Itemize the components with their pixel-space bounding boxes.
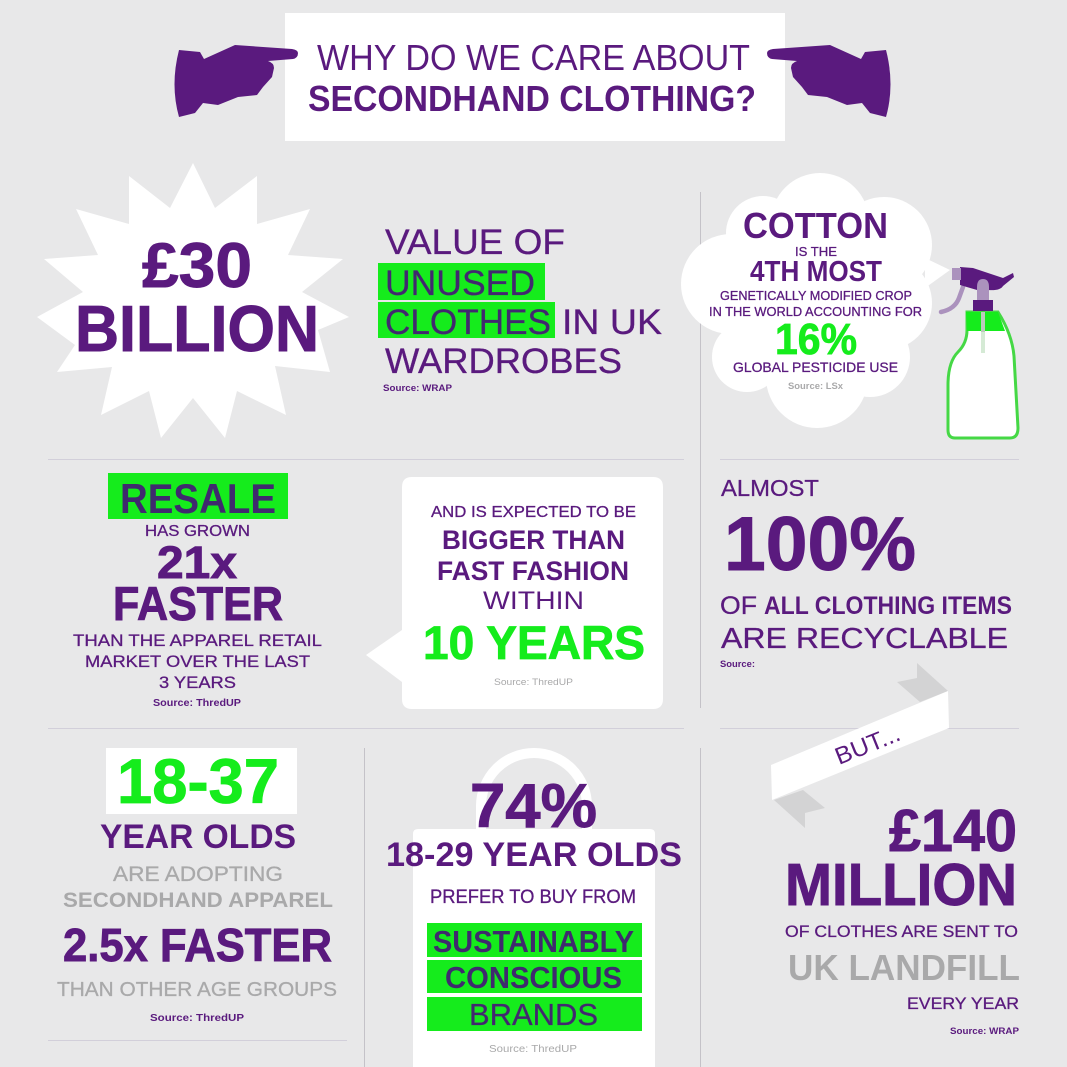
text block: bigger than fast fashion: Source: ThredUP: [494, 677, 573, 687]
text block: cotton: Source: LSx: [788, 381, 843, 391]
title: SECONDHAND CLOTHING?: [308, 78, 756, 119]
text block: 74 percent: 18-29 YEAR OLDS: [386, 836, 682, 874]
source: Source: WRAP: [383, 383, 452, 393]
panel: landfill: £140: [889, 798, 1017, 864]
bag body: [413, 829, 655, 1067]
panel: landfill: UK LANDFILL: [788, 947, 1020, 988]
highlight panel: [106, 748, 297, 814]
text block: resale growth: THAN THE APPAREL RETAIL: [73, 631, 322, 650]
text block: age group: THAN OTHER AGE GROUPS: [57, 979, 337, 1001]
panel: resale: [73, 473, 322, 709]
text block: bigger than fast fashion: FAST FASHION: [437, 556, 629, 586]
panel: speech bubble: [366, 477, 663, 709]
text block: cotton: 4TH MOST: [750, 256, 882, 288]
stat: 30 billion: BILLION: [75, 292, 319, 365]
text block: bigger than fast fashion: AND IS EXPECTED TO BE: [431, 504, 636, 521]
text block: age group: SECONDHAND APPAREL: [63, 889, 333, 912]
highlight: unused: [378, 263, 545, 300]
text block: age group: Source: ThredUP: [150, 1013, 244, 1024]
header: [174, 13, 890, 141]
banner: but: [771, 663, 949, 828]
title panel: [285, 13, 785, 141]
panel: recyclable: ALMOST: [721, 475, 819, 501]
panel: cotton: [681, 173, 1018, 438]
text block: 74 percent: [386, 772, 682, 1055]
panel: landfill: [785, 798, 1020, 1036]
text block: 74 percent: SUSTAINABLY: [433, 924, 634, 959]
panel: recyclable: [720, 475, 1012, 669]
text block: age group: [57, 747, 337, 1024]
panel: 30 billion: [37, 163, 349, 438]
text block: cotton: GLOBAL PESTICIDE USE: [733, 359, 898, 375]
text block: bigger than fast fashion: 10 YEARS: [423, 616, 645, 669]
panel: unused clothes: [378, 223, 662, 393]
panel: 18-37 year olds: [57, 747, 337, 1024]
text block: value of unused clothes: [385, 223, 662, 381]
text block: cotton: COTTON: [743, 205, 888, 246]
text block: cotton: 16%: [775, 315, 857, 364]
panel: landfill: MILLION: [785, 852, 1017, 918]
text block: value of unused clothes: WARDROBES: [385, 342, 622, 381]
text block: resale growth: Source: ThredUP: [153, 698, 241, 709]
panel: landfill: Source: WRAP: [950, 1026, 1019, 1036]
text block: 74 percent: Source: ThredUP: [489, 1044, 577, 1055]
text block: 74 percent: CONSCIOUS: [445, 960, 622, 995]
text block: cotton: IS THE: [795, 244, 837, 259]
panel: recyclable: Source:: [720, 659, 755, 669]
panel: landfill: EVERY YEAR: [907, 994, 1019, 1013]
bag handle: [481, 753, 587, 830]
panel: recyclable: ARE RECYCLABLE: [721, 623, 1008, 655]
text block: value of unused clothes: UNUSED: [385, 264, 535, 303]
text block: value of unused clothes: IN UK: [562, 303, 662, 342]
text block: 74 percent: 74%: [470, 772, 597, 841]
icon: left pointing hand: [174, 45, 298, 117]
highlight: clothes: [378, 302, 555, 338]
text block: age group: 2.5x FASTER: [63, 919, 332, 971]
text block: resale growth: MARKET OVER THE LAST: [85, 652, 310, 671]
text block: cotton: GENETICALLY MODIFIED CROP: [720, 288, 912, 303]
speech bubble shape: [366, 477, 663, 709]
text block: resale growth: RESALE: [120, 475, 276, 522]
panel: shopping bag: [386, 753, 682, 1067]
panel: landfill: OF CLOTHES ARE SENT TO: [785, 922, 1018, 941]
text block: bigger than fast fashion: [423, 504, 645, 687]
text block: bigger than fast fashion: WITHIN: [483, 587, 584, 615]
panel: recyclable: ALL CLOTHING ITEMS: [764, 592, 1012, 620]
text block: 74 percent: PREFER TO BUY FROM: [430, 887, 636, 908]
highlight: resale: [108, 473, 288, 519]
text block: value of unused clothes: CLOTHES: [385, 303, 551, 342]
text block: bigger than fast fashion: BIGGER THAN: [442, 525, 625, 555]
panel: recyclable: 100%: [724, 502, 916, 587]
text block: resale growth: 3 YEARS: [159, 673, 236, 692]
panel: recyclable: OF: [720, 592, 757, 620]
text block: age group: ARE ADOPTING: [113, 863, 283, 886]
text block: resale growth: 21x: [157, 537, 237, 588]
text block: resale growth: [73, 475, 322, 709]
icon: right pointing hand: [767, 45, 890, 117]
starburst: [37, 163, 349, 438]
text block: 74 percent: BRANDS: [469, 997, 598, 1032]
cloud: [681, 173, 950, 428]
text block: cotton: IN THE WORLD ACCOUNTING FOR: [709, 304, 922, 319]
text block: resale growth: FASTER: [113, 577, 283, 630]
title: [308, 37, 756, 119]
text block: age group: YEAR OLDS: [100, 818, 296, 856]
stat: 30 billion: [75, 231, 319, 365]
banner: but: BUT...: [831, 720, 904, 771]
text block: value of unused clothes: VALUE OF: [385, 223, 565, 262]
icon: spray bottle: [941, 267, 1018, 438]
highlights: [427, 923, 642, 1031]
text block: resale growth: HAS GROWN: [145, 523, 250, 540]
title: WHY DO WE CARE ABOUT: [317, 37, 750, 78]
text block: cotton: [709, 205, 922, 391]
stat: 30 billion: £30: [142, 231, 252, 301]
text block: age group: 18-37: [117, 747, 279, 817]
